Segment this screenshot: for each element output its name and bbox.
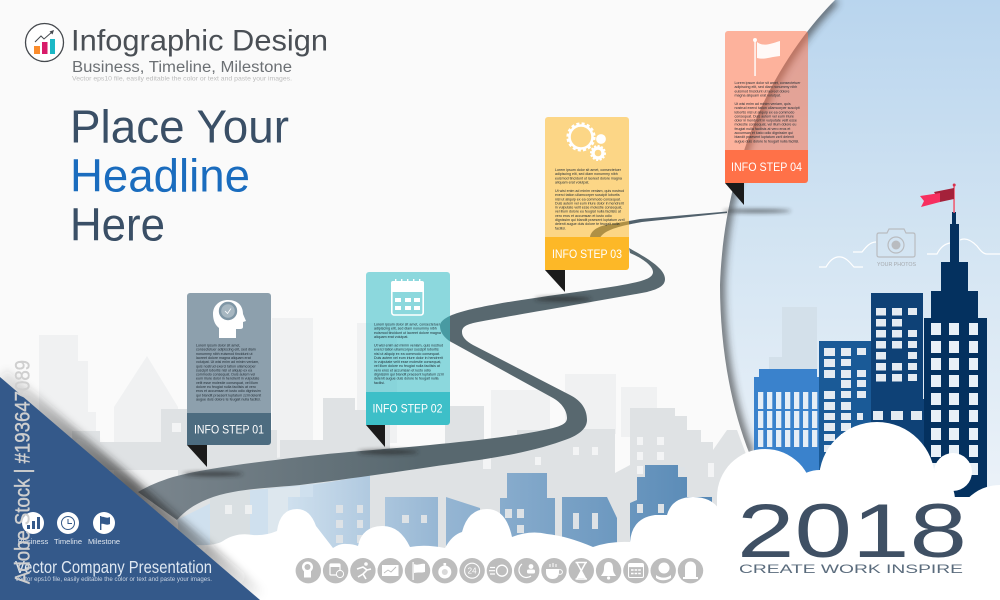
step 01 copy: quis nostrud exerci tation ullamcorper [196, 364, 257, 368]
panel: step 02 [366, 272, 450, 447]
step 01 copy: consectetuer adipiscing elit, sed diam [196, 348, 256, 352]
icon: hourglass [569, 558, 594, 583]
icon: hand with clock [650, 558, 676, 583]
step 01 copy: eros et accumsan et iusto odio dignissim [196, 389, 261, 393]
tagline: CREATE WORK INSPIRE [739, 562, 963, 576]
bottom cloud band [195, 497, 722, 600]
step 02 copy: Ut wisi enim ad minim veniam, quis nostrud [374, 343, 443, 347]
building: mid blue [819, 341, 873, 481]
step 03 copy: dignissim qui blandit praesent luptatum zzril [555, 218, 625, 222]
icon: bell [596, 558, 621, 583]
year 2018: 2018 [737, 489, 967, 574]
step 02 copy: nisl ut aliquip ex ea commodo consequat. [374, 352, 440, 356]
step 03 copy: facilisi. [555, 226, 566, 230]
step 04 label: INFO STEP 04 [731, 160, 802, 174]
panel: blue corner triangle [0, 377, 260, 600]
presentation note: Vector eps10 file, easily editable the color or text and paste your images. [15, 576, 212, 583]
step 01 label: INFO STEP 01 [194, 422, 264, 436]
pin shadows on road [183, 209, 791, 476]
icon: milestone [93, 512, 115, 534]
skyline: blue foreground buildings [288, 465, 712, 550]
icon: tombstone door [678, 558, 703, 583]
step 02 copy: in vulputate velit esse molestie consequat, [374, 360, 441, 364]
road far end, thin section [590, 212, 727, 238]
headline line 2: Headline [70, 150, 250, 202]
step 02 copy: Duis autem vel eum iriure dolor in hendrerit [374, 356, 443, 360]
business label: Business [18, 537, 48, 546]
building: tall tower [924, 212, 987, 510]
milestone label: Milestone [88, 537, 120, 546]
icon: calendar [391, 279, 424, 315]
headline line 3: Here [70, 199, 165, 251]
step 01 copy: dolore eu feugiat nulla facilisis at vero [196, 385, 256, 389]
panel: sky with city [720, 0, 1000, 487]
step 02 label: INFO STEP 02 [372, 402, 443, 416]
step 04 copy: feugiat nulla facilisis at vero eros et [734, 127, 790, 131]
step 03 copy: nisl ut aliquip ex ea commodo consequat. [555, 197, 621, 201]
step 01 copy: velit esse molestie consequat, vel illum [196, 381, 258, 385]
headline line 1: Place Your [70, 101, 289, 153]
title: Infographic Design [71, 24, 328, 58]
icon: stopwatch [432, 558, 457, 583]
step 04 copy: euismod tincidunt ut laoreet dolore [734, 89, 789, 93]
step 01 copy: qui blandit praesent luptatum zzril delenit [196, 393, 261, 397]
step 03 copy: adipiscing elit, sed diam nonummy nibh [555, 172, 618, 176]
pin 01 [187, 445, 207, 467]
step 04 copy: augue duis dolore te feugait nulla facilisi. [734, 139, 799, 143]
pin 03 [545, 270, 565, 292]
panel: step 01 [187, 293, 271, 467]
step 04 copy: blandit praesent luptatum zzril delenit [734, 135, 794, 139]
step 03 copy: aliquam erat volutpat. [555, 180, 589, 184]
step 02 copy: adipiscing elit, sed diam nonummy nibh [374, 327, 437, 331]
step 03 copy: Ut wisi enim ad minim veniam, quis nostrud [555, 189, 624, 193]
step 02 copy: vel illum dolore eu feugiat nulla facilisis at [374, 364, 440, 368]
step 02 copy: aliquam erat volutpat. [374, 335, 408, 339]
faint distant building [769, 307, 817, 369]
icon: flag [753, 38, 780, 76]
building: navy [871, 293, 932, 470]
milestone road [138, 212, 727, 520]
step 01 copy: Lorem ipsum dolor sit amet, [196, 344, 240, 348]
subtitle: Business, Timeline, Milestone [72, 59, 292, 76]
step 02 copy: Lorem ipsum dolor sit amet, consectetuer [374, 322, 441, 326]
icon: person clock [514, 558, 539, 583]
step 03 copy: Duis autem vel eum iriure dolor in hendrerit [555, 201, 624, 205]
step 03 copy: exerci tation ullamcorper suscipit lobortis [555, 193, 620, 197]
triangle shadow [0, 377, 260, 600]
step 01 copy: suscipit lobortis nisl ut aliquip ex ea [196, 368, 252, 372]
step 03 copy: Lorem ipsum dolor sit amet, consectetuer [555, 168, 622, 172]
step 01 copy: nonummy nibh euismod tincidunt ut [196, 352, 253, 356]
icon: head [296, 558, 321, 583]
buildings: downtown skyline [754, 184, 987, 510]
icon: coffee cup [541, 558, 567, 583]
icon: gears [568, 124, 605, 160]
big cloud right [717, 422, 1000, 600]
icon: business [22, 512, 44, 534]
step 02 copy: delenit augue duis dolore te feugait nulla [374, 377, 439, 381]
icon: chart board [378, 558, 403, 583]
cloud outlines [819, 239, 1000, 267]
icon: flag [405, 558, 430, 583]
pin 04 [725, 183, 744, 205]
step 03 copy: in vulputate velit esse molestie consequat, [555, 206, 622, 210]
step 01 copy: commodo consequat. Duis autem vel [196, 373, 255, 377]
step 04 copy: nostrud exerci tation ullamcorper suscipit [734, 106, 800, 110]
icon row [296, 558, 703, 583]
logo icon [26, 24, 64, 62]
skyline: grey near buildings [72, 398, 750, 560]
step 04 copy: consequat. Duis autem vel eum iriure [734, 114, 794, 118]
step 01 copy: augue duis dolore te feugait nulla facilisi. [196, 397, 261, 401]
your photos caption: YOUR PHOTOS [877, 262, 916, 268]
step 04 copy: Lorem ipsum dolor sit amet, consectetuer [734, 81, 801, 85]
step 04 copy: magna aliquam erat volutpat. [734, 93, 781, 97]
step 04 copy: adipiscing elit, sed diam nonummy nibh [734, 85, 797, 89]
pale blue ground below road [177, 478, 370, 560]
icon: head with clock [213, 300, 246, 338]
step 01 copy: laoreet dolore magna aliquam erat [196, 356, 251, 360]
building: blue low rise [754, 369, 822, 500]
step 02 copy: vero eros et accumsan et iusto odio [374, 368, 431, 372]
step 04 copy: accumsan et iusto odio dignissim qui [734, 131, 793, 135]
step 02 copy: euismod tincidunt ut laoreet dolore magna [374, 331, 441, 335]
icon: 24 hours: 24 [468, 567, 477, 576]
icon: fast clock [487, 558, 512, 583]
step 02 copy: facilisi. [374, 381, 385, 385]
icon: 24 hours [459, 558, 485, 583]
icon: runner [350, 558, 376, 583]
subtitle note: Vector eps10 file, easily editable the color or text and paste your images. [72, 76, 292, 82]
skyline windows [172, 423, 714, 477]
step 04 copy: molestie consequat, vel illum dolore eu [734, 123, 796, 127]
step 01 copy: eum iriure dolor in hendrerit in vulputate [196, 377, 259, 381]
step 03 copy: delenit augue duis dolore te feugait nulla [555, 222, 620, 226]
step 04 copy: Ut wisi enim ad minim veniam, quis [734, 102, 791, 106]
headline [70, 101, 289, 251]
icon: calendar [623, 558, 649, 583]
icon: calendar clock [323, 558, 348, 583]
step 04 copy: lobortis nisl ut aliquip ex ea commodo [734, 110, 794, 114]
step 03 copy: vero eros et accumsan et iusto odio [555, 214, 612, 218]
icon: red flag on tower [920, 184, 956, 213]
skyline: pale far buildings [39, 318, 657, 500]
step 01 copy: volutpat. Ut wisi enim ad minim veniam, [196, 360, 259, 364]
step 02 copy: dignissim qui blandit praesent luptatum zzril [374, 372, 444, 376]
timeline label: Timeline [54, 537, 82, 546]
icon: camera placeholder [877, 229, 915, 257]
step 04 copy: dolor in hendrerit in vulputate velit esse [734, 119, 797, 123]
step 02 copy: exerci tation ullamcorper suscipit lobortis [374, 348, 439, 352]
panel: step 03 [545, 117, 629, 292]
step 03 copy: vel illum dolore eu feugiat nulla facilisis at [555, 210, 621, 214]
step 03 label: INFO STEP 03 [552, 247, 622, 261]
icon: timeline [57, 512, 79, 534]
stock id vertical text: Adobe Stock | #193647089 [12, 360, 34, 584]
presentation heading: Vector Company Presentation [15, 557, 212, 577]
panel: step 04 [725, 31, 808, 205]
step 03 copy: euismod tincidunt ut laoreet dolore magna [555, 176, 622, 180]
pin 02 [366, 425, 385, 447]
